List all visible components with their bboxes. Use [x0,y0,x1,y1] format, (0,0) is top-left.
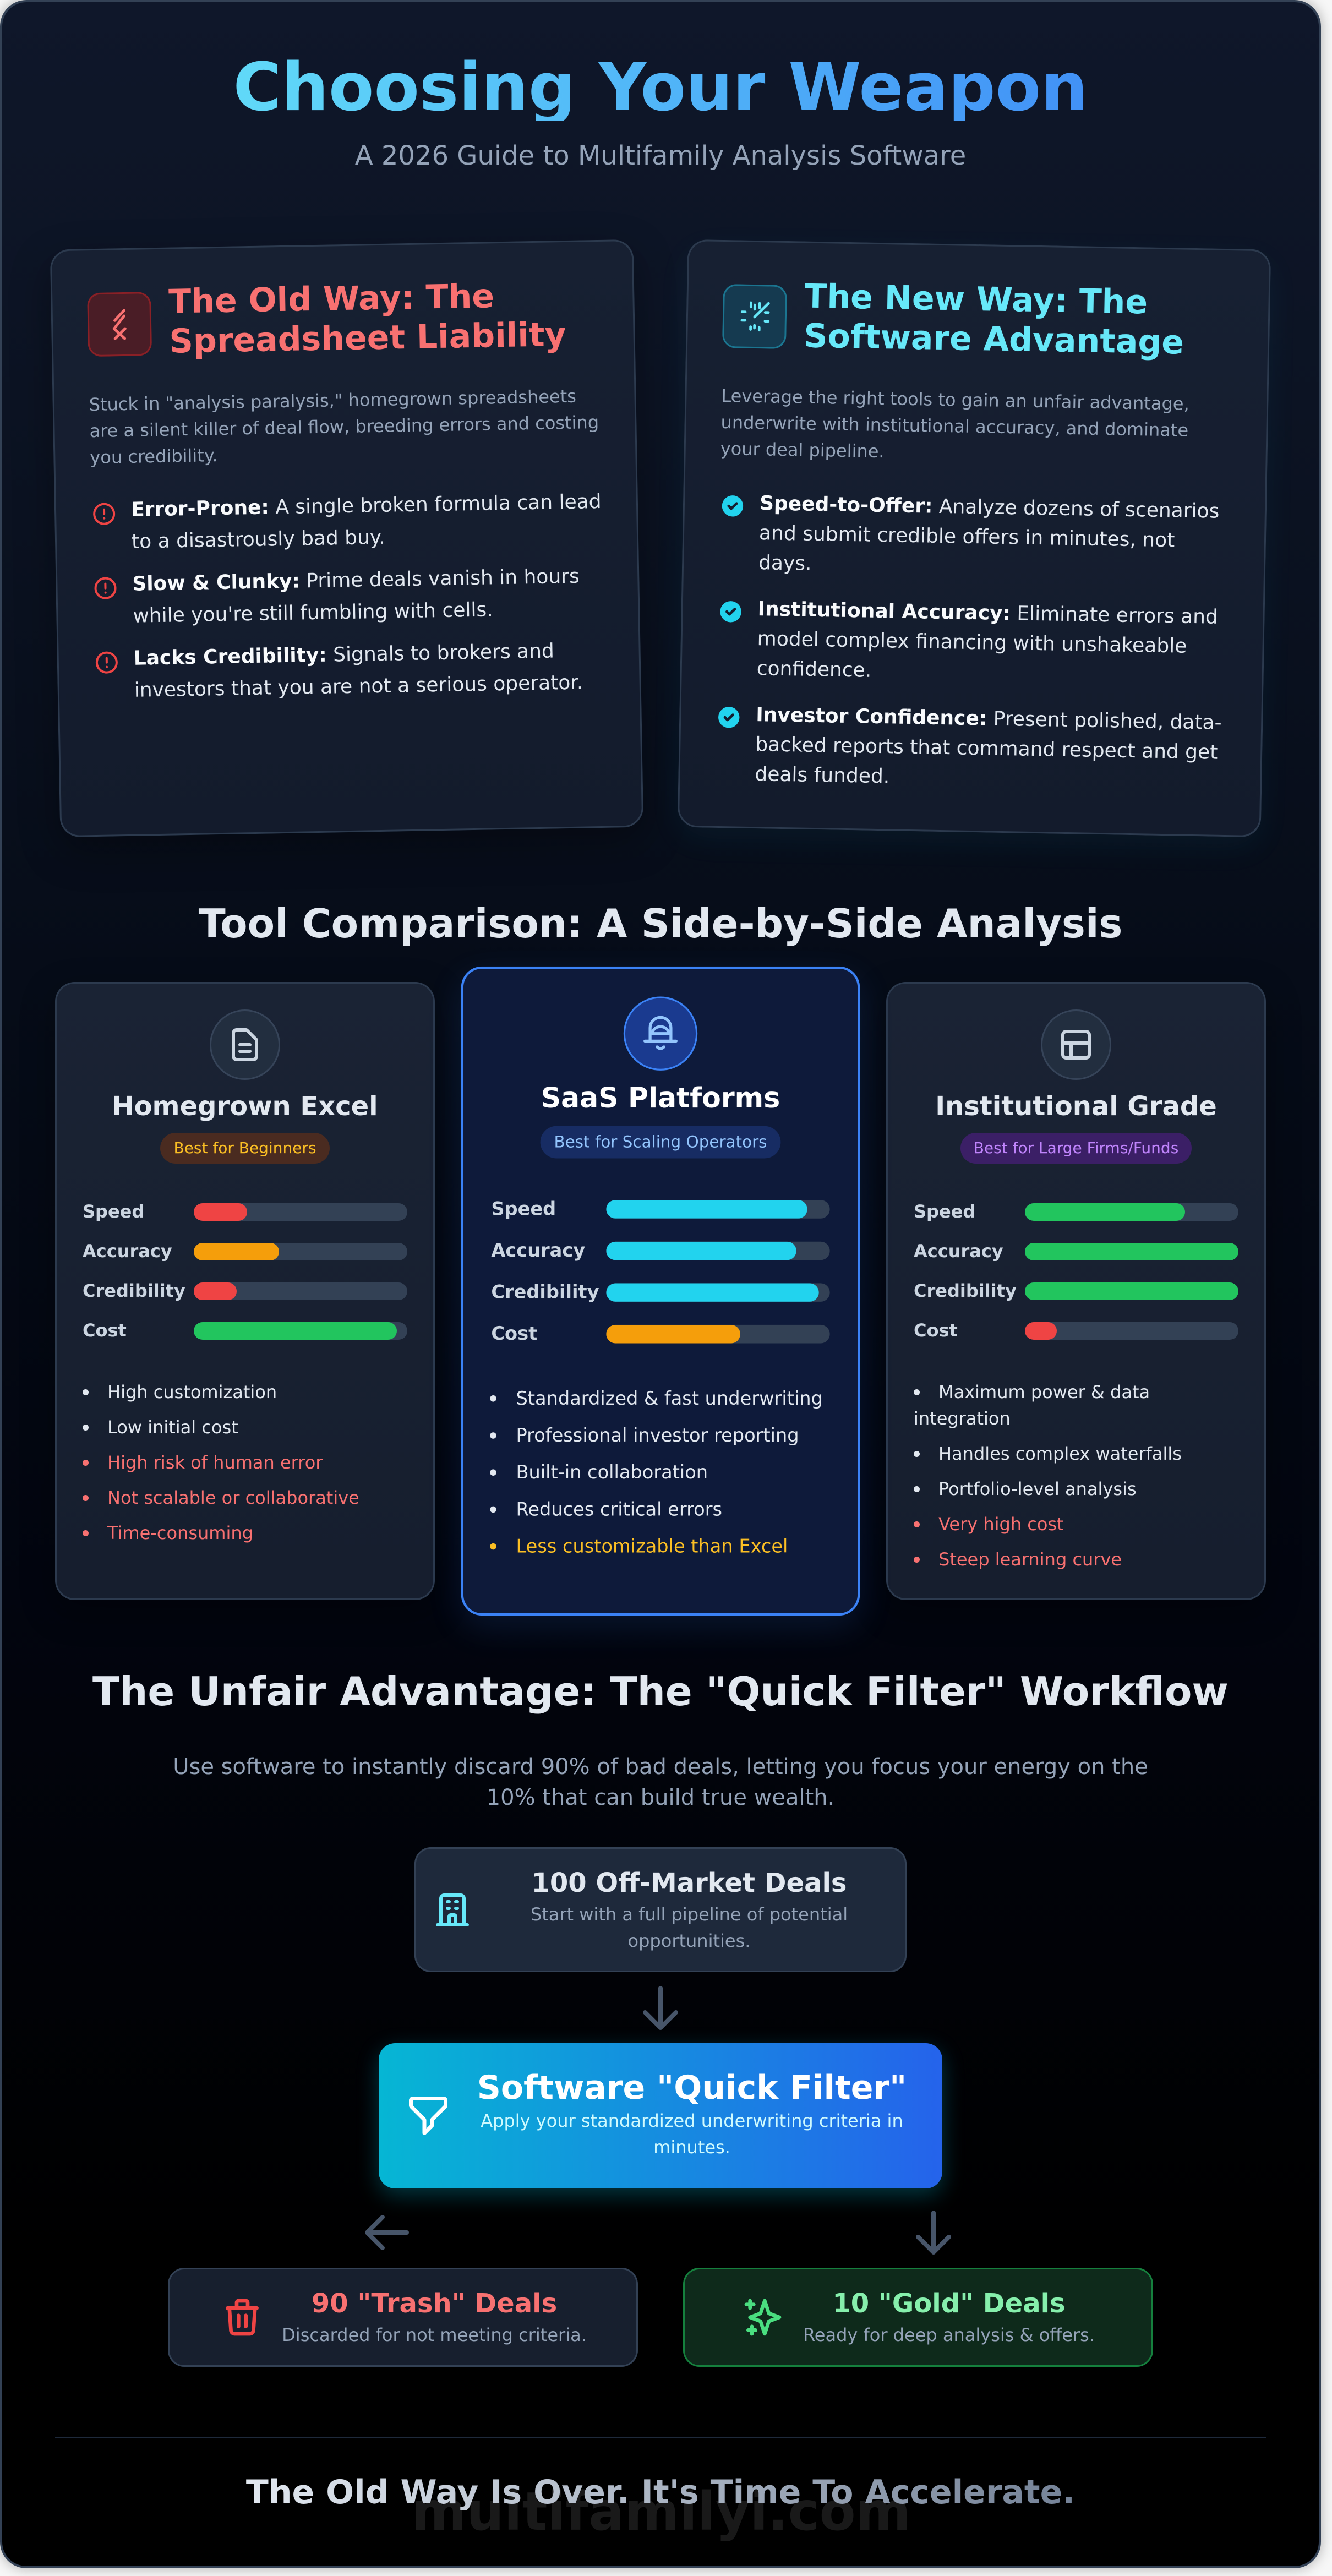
footer call to action: The Old Way Is Over. It's Time To Accelerate. [246,2473,1075,2512]
old way description: you credibility. [90,445,218,468]
subtitle: A 2026 Guide to Multifamily Analysis Software [355,140,966,171]
point: error-prone: Error-Prone: A single broken formula can lead [131,490,602,521]
outcome text: 10 "Gold" Deals [832,2288,1066,2319]
point: speed-to-offer: days. [758,552,812,575]
icon: bell [624,997,697,1071]
workflow intro text [0,1751,1321,1813]
point: speed-to-offer: and submit credible offers in minutes, not [759,522,1175,552]
panel: institutional grade [886,982,1266,1600]
point: investor confidence: backed reports that command respect and get [755,733,1218,764]
step text: minutes. [653,2137,730,2158]
bar: cost 15%: Cost [914,1320,958,1341]
pros and cons list [914,1379,1244,1581]
bar: accuracy 40% [83,1243,407,1260]
outcome text: Discarded for not meeting criteria. [282,2324,587,2345]
bar: credibility 95%: Credibility [491,1281,599,1303]
point: speed-to-offer [722,492,1220,575]
bar: accuracy 85%: Accuracy [491,1240,585,1261]
title: Choosing Your Weapon [233,50,1088,126]
name: Institutional Grade [935,1091,1217,1122]
step text: Apply your standardized underwriting criteria in [481,2110,903,2131]
step text [531,1866,848,1954]
pros and cons list: Steep learning curve [938,1549,1122,1570]
pros and cons list: High customization [107,1382,277,1402]
bar: cost 95%: Cost [83,1320,127,1341]
bar: speed 75% [914,1203,1238,1221]
point: error-prone [93,490,602,553]
bar: credibility 20% [83,1282,407,1300]
bar: accuracy 40%: Accuracy [83,1241,172,1262]
point: institutional accuracy: model complex financing with unshakeable [757,627,1187,658]
point: investor confidence: deals funded. [755,763,890,788]
outcome text [803,2287,1095,2348]
pros and cons list: Low initial cost [107,1417,238,1438]
heading: new way: Software Advantage [804,317,1184,362]
name: Homegrown Excel [112,1091,378,1122]
pros and cons list: Very high cost [938,1514,1064,1535]
point: lacks credibility: investors that you are not a serious operator. [134,671,583,701]
step text: Start with a full pipeline of potential [531,1904,848,1925]
heading: tool comparison: Tool Comparison: A Side-by-Side Analysis [199,900,1122,947]
bar: speed 90%: Speed [491,1198,556,1220]
new way description: underwrite with institutional accuracy, and dominate [720,412,1188,441]
bar: accuracy 100%: Accuracy [914,1241,1003,1262]
arrow: down to gold deals [907,2206,960,2259]
pros and cons list [490,1384,837,1569]
point: investor confidence: Investor Confidence: Present polished, data- [756,703,1222,734]
badge: Best for Scaling Operators [554,1132,767,1151]
bar: accuracy 100% [914,1243,1238,1260]
pros and cons list: Maximum power & data [938,1382,1150,1402]
point: investor confidence [718,703,1222,788]
old way description: are a silent killer of deal flow, breeding errors and costing [89,412,599,441]
badge: Best for Beginners [173,1139,316,1157]
heading: old way: Spreadsheet Liability [169,315,566,361]
bar: cost 60% [490,1325,831,1344]
point: lacks credibility: Lacks Credibility: Signals to brokers and [133,640,554,670]
panel: the old way [50,239,643,837]
heading: quick filter workflow: The Unfair Advantage: The "Quick Filter" Workflow [92,1668,1229,1715]
bar: credibility 20%: Credibility [83,1280,185,1301]
outcome text: 90 "Trash" Deals [312,2288,557,2319]
bar: cost 60%: Cost [491,1323,537,1345]
pros and cons list: integration [914,1408,1011,1429]
icon: trash [220,2295,264,2339]
icon: office building [433,1890,472,1930]
heading: new way [804,277,1184,362]
point: slow and clunky [95,565,580,627]
point: slow and clunky: while you're still fumbling with cells. [133,598,493,627]
bar: credibility 95% [490,1283,831,1302]
point: speed-to-offer: Speed-to-Offer: Analyze dozens of scenarios [760,492,1220,523]
pros and cons list: Reduces critical errors [516,1498,722,1520]
pros and cons list: Professional investor reporting [516,1425,799,1446]
new way description [720,385,1189,462]
arrow: left to trash deals [361,2206,413,2259]
pros and cons list: Built-in collaboration [516,1461,708,1483]
point: institutional accuracy [720,598,1218,682]
outcome text [282,2287,587,2348]
step: 100 off-market deals [414,1847,907,1972]
bar: speed 75%: Speed [914,1201,975,1222]
outcome: trash deals [168,2268,638,2367]
pros and cons list: Time-consuming [107,1522,253,1543]
pros and cons list: Standardized & fast underwriting [516,1387,823,1409]
icon: software spark [722,284,787,349]
point: slow and clunky: Slow & Clunky: Prime deals vanish in hours [132,565,580,596]
pros and cons list [83,1379,413,1555]
name: SaaS Platforms [541,1082,780,1115]
icon: broken spreadsheet [87,292,152,357]
pros and cons list: Less customizable than Excel [516,1535,788,1557]
bar: speed 90% [490,1200,831,1219]
workflow intro text: 10% that can build true wealth. [487,1785,834,1810]
outcome: gold deals [683,2268,1153,2367]
arrow: down to filter [634,1982,687,2034]
new way description: Leverage the right tools to gain an unfair advantage, [721,385,1189,414]
icon: document [210,1009,280,1080]
bar: cost 95% [83,1322,407,1340]
heading: old way [168,277,566,361]
point: lacks credibility [96,640,583,701]
step text: Software "Quick Filter" [477,2069,907,2107]
bar: cost 15% [914,1322,1238,1340]
bar: credibility 100% [914,1282,1238,1300]
watermark: multifamilyi.com [411,2481,911,2542]
step text: opportunities. [628,1930,750,1951]
workflow intro text: Use software to instantly discard 90% of bad deals, letting you focus your energy on the [173,1754,1148,1780]
panel: homegrown excel [55,982,435,1600]
point: error-prone: to a disastrously bad buy. [132,526,385,553]
pros and cons list: Not scalable or collaborative [107,1487,359,1508]
pros and cons list: High risk of human error [107,1452,323,1473]
pros and cons list: Handles complex waterfalls [938,1443,1182,1464]
bar: speed 25%: Speed [83,1201,144,1222]
heading: old way: The Old Way: The [168,277,495,321]
pros and cons list: Portfolio-level analysis [938,1478,1137,1499]
heading: new way: The New Way: The [804,277,1148,321]
badge: Best for Large Firms/Funds [974,1139,1178,1157]
title [55,55,1266,121]
step: software quick filter [379,2043,942,2188]
old way description [89,386,599,468]
bar: credibility 100%: Credibility [914,1280,1017,1301]
bar: accuracy 85% [490,1242,831,1260]
panel: the new way [678,239,1271,837]
outcome text: Ready for deep analysis & offers. [803,2324,1095,2345]
old way description: Stuck in "analysis paralysis," homegrown spreadsheets [89,386,576,415]
step text [477,2068,907,2160]
point: institutional accuracy: confidence. [756,657,872,682]
new way description: your deal pipeline. [720,438,885,462]
step text: 100 Off-Market Deals [531,1868,847,1898]
icon: funnel [405,2093,451,2139]
point: institutional accuracy: Institutional Accuracy: Eliminate errors and [757,598,1218,629]
bar: speed 25% [83,1201,407,1222]
icon: layout [1041,1009,1111,1080]
panel: saas platforms [461,967,860,1616]
icon: sparkles [741,2295,785,2339]
